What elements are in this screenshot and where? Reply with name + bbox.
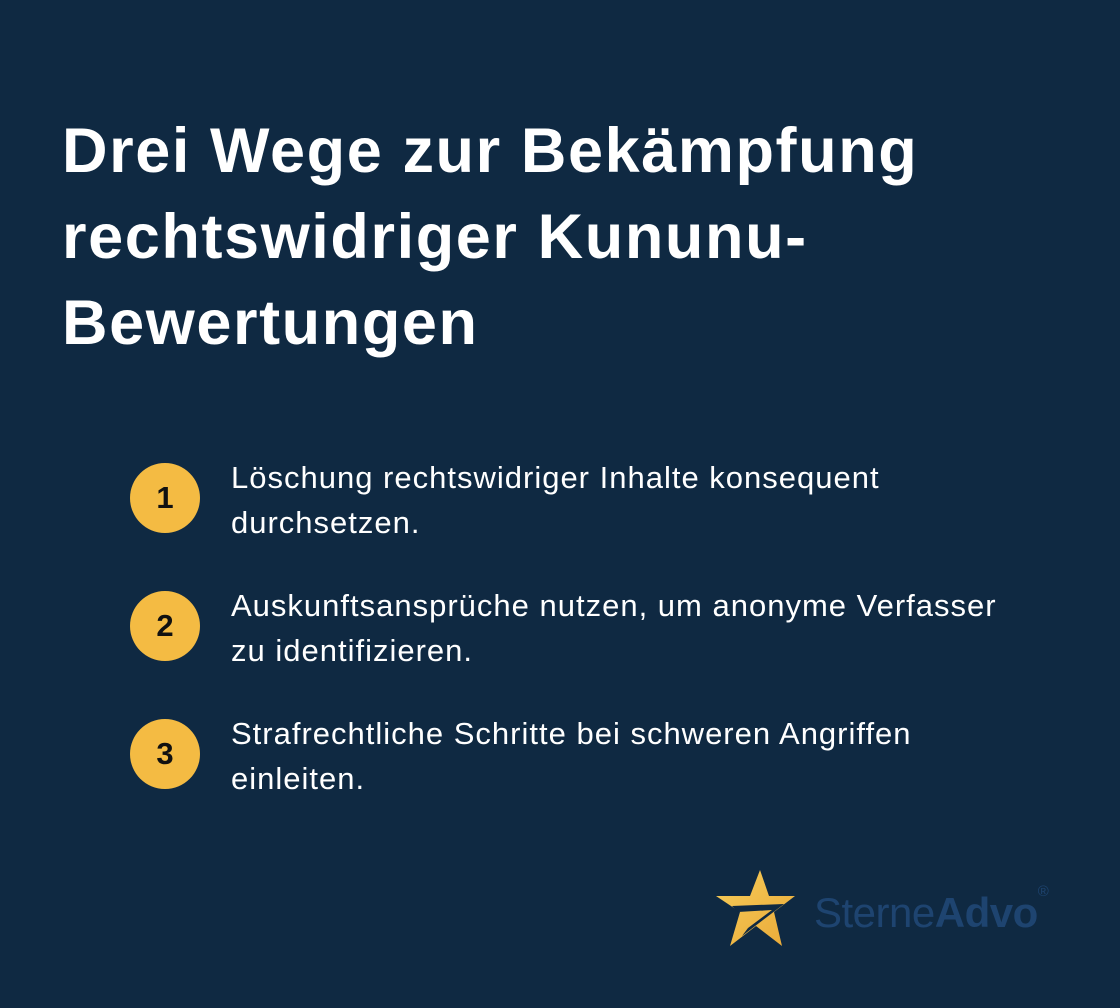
item 1 (130, 460, 880, 540)
text 2: Auskunftsansprüche nutzen, um anonyme Verfasser (231, 588, 997, 623)
title (62, 116, 918, 358)
text 3: Strafrechtliche Schritte bei schweren Angriffen (231, 716, 912, 751)
text 2 (231, 588, 997, 668)
text 1: durchsetzen. (231, 505, 420, 540)
text 3 (231, 716, 912, 796)
badge 1 (130, 463, 200, 533)
badge 1: 1 (156, 480, 174, 515)
item 2 (130, 588, 997, 668)
logo (716, 870, 1048, 946)
badge 3: 3 (156, 736, 174, 771)
text 2: zu identifizieren. (231, 633, 473, 668)
badge 3 (130, 719, 200, 789)
text 1: Löschung rechtswidriger Inhalte konsequent (231, 460, 880, 495)
item 3 (130, 716, 912, 796)
badge 2 (130, 591, 200, 661)
text 3: einleiten. (231, 761, 365, 796)
badge 2: 2 (156, 608, 174, 643)
brand name: SterneAdvo® (814, 883, 1048, 936)
title: Bewertungen (62, 288, 479, 358)
title: Drei Wege zur Bekämpfung rechtswidriger Kununu- (62, 116, 918, 272)
icon: star (716, 870, 795, 946)
text 1 (231, 460, 880, 540)
